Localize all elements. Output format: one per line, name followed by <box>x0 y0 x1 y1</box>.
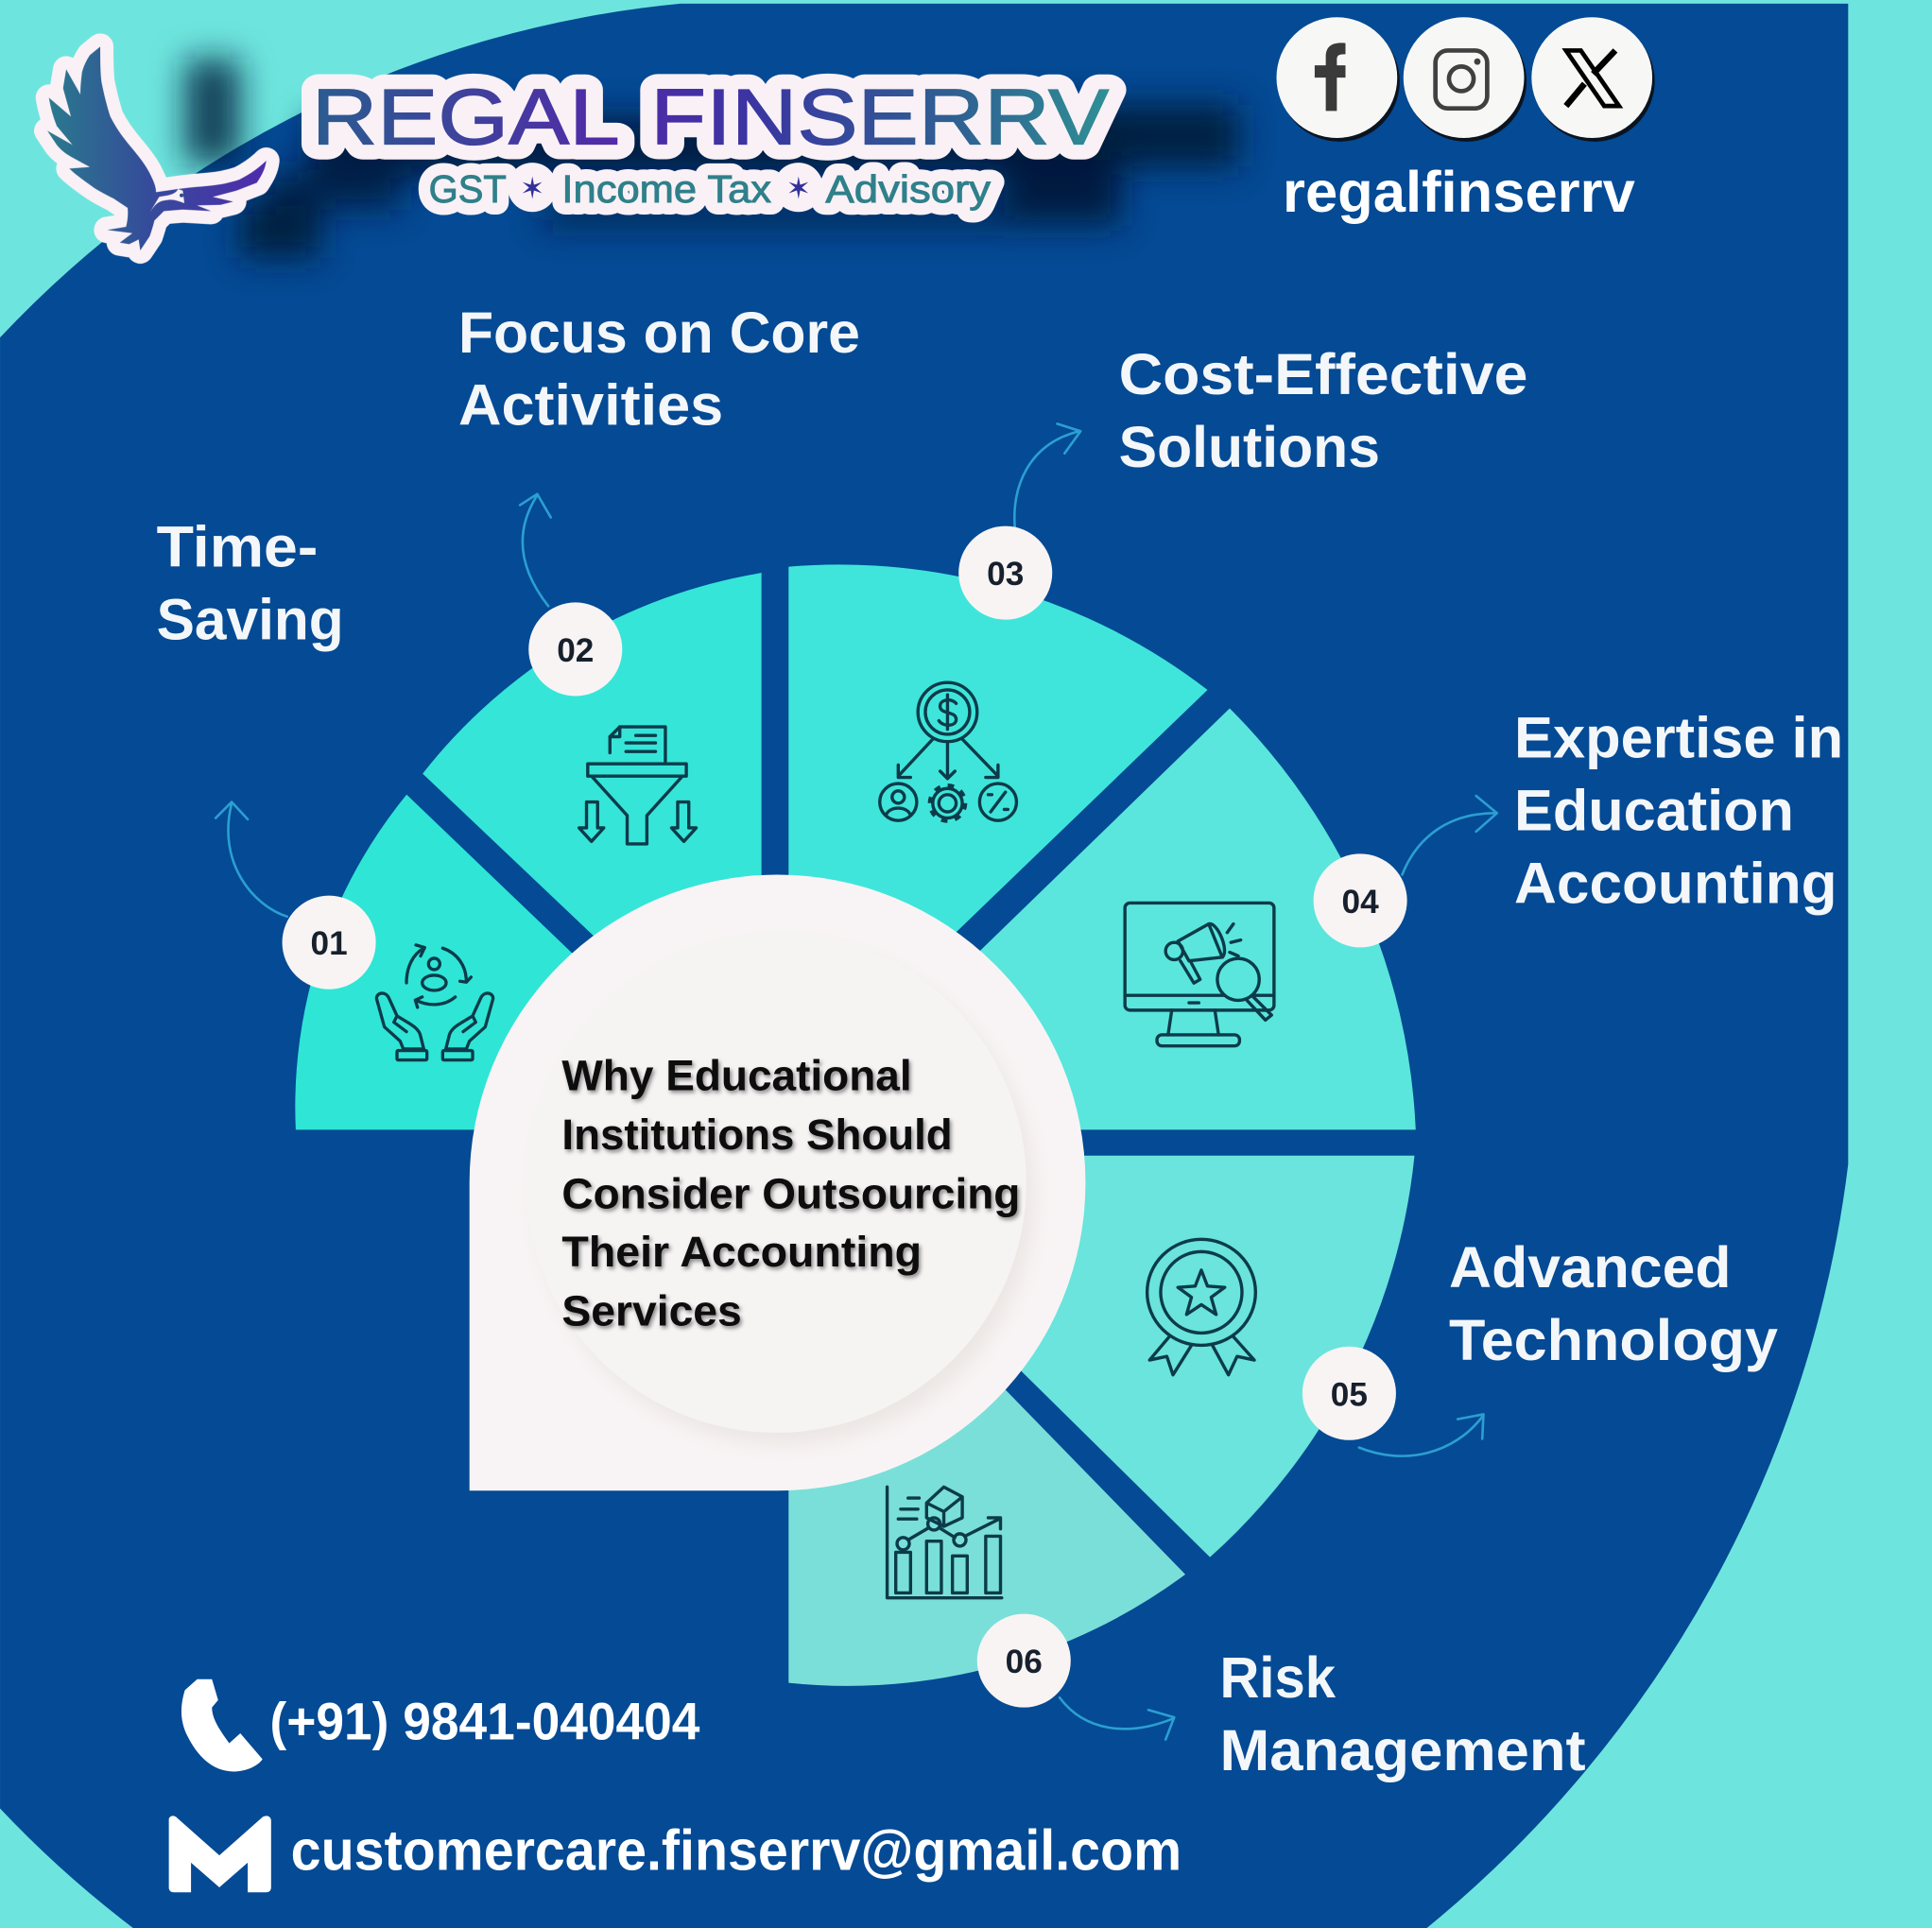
center title: Their Accounting <box>561 1228 922 1276</box>
logo: tagline: Income Tax <box>561 167 771 211</box>
badge 06: 06 <box>1006 1644 1043 1680</box>
logo: brand name: FINSERRV <box>650 73 1110 162</box>
logo: tagline <box>429 163 992 212</box>
icon: monitor with megaphone <box>1125 903 1274 1046</box>
logo: brand name <box>312 73 1110 162</box>
badge 02: 02 <box>557 632 594 669</box>
badge 02 <box>528 602 622 696</box>
icon: dollar split <box>880 682 1016 820</box>
email address: customercare.finserrv@gmail.com <box>291 1819 1182 1883</box>
phone number: (+91) 9841-040404 <box>270 1692 699 1751</box>
logo: brand name: REGAL <box>312 73 620 162</box>
label 04: Expertise in <box>1514 706 1843 770</box>
label 06: Risk <box>1220 1645 1337 1710</box>
badge 01: 01 <box>311 925 348 962</box>
label 02: Activities <box>458 373 723 438</box>
badge 03: 03 <box>987 556 1024 593</box>
label 05: Technology <box>1449 1308 1778 1372</box>
logo: eagle emblem <box>47 46 267 250</box>
center title: Why Educational <box>561 1052 912 1100</box>
label 01 <box>157 515 344 652</box>
center title: Services <box>561 1287 742 1335</box>
segment 05 <box>937 1156 1414 1558</box>
label 02: Focus on Core <box>458 301 860 365</box>
segment 01 <box>295 795 641 1129</box>
center title: Consider Outsourcing <box>561 1170 1020 1218</box>
icon: phone <box>181 1679 263 1771</box>
arrow 03 <box>1014 423 1080 532</box>
logo shadow <box>185 60 1238 257</box>
label 05 <box>1449 1235 1778 1372</box>
label 04: Accounting <box>1514 851 1837 915</box>
badge 01 <box>283 896 376 990</box>
label 02 <box>458 301 860 438</box>
center title: Institutions Should <box>561 1110 953 1159</box>
icon: funnel with document <box>579 727 697 844</box>
logo: brand name: FINSERRV <box>650 73 1110 162</box>
label 05: Advanced <box>1449 1235 1731 1300</box>
arrow 04 <box>1402 796 1497 874</box>
label 03: Cost-Effective <box>1119 342 1527 406</box>
label 06: Management <box>1220 1718 1586 1782</box>
logo: tagline: Income Tax <box>561 167 771 211</box>
icon: growth chart <box>888 1487 1002 1598</box>
center title <box>561 1052 1020 1335</box>
label 01: Time- <box>157 515 318 579</box>
logo: tagline: ✶ <box>520 172 544 205</box>
label 04 <box>1514 706 1843 915</box>
arrow 05 <box>1359 1414 1483 1456</box>
badge 04 <box>1314 853 1407 947</box>
badge 04: 04 <box>1342 884 1379 921</box>
badge 06 <box>977 1614 1071 1708</box>
social handle: regalfinserrv <box>1283 160 1635 224</box>
icon: X <box>1531 17 1655 142</box>
center teardrop <box>470 874 1085 1490</box>
label 06 <box>1220 1645 1586 1782</box>
icon: facebook <box>1276 17 1400 142</box>
label 03: Solutions <box>1119 415 1380 479</box>
logo: tagline: ✶ <box>786 172 811 205</box>
label 04: Education <box>1514 779 1794 843</box>
logo: tagline: GST <box>429 167 507 211</box>
logo: tagline: Advisory <box>825 167 992 211</box>
icon: mail M <box>169 1816 271 1892</box>
arrow 01 <box>216 802 287 917</box>
badge 05: 05 <box>1331 1376 1368 1413</box>
segment 02 <box>423 573 762 1004</box>
badge 05 <box>1302 1347 1396 1440</box>
label 01: Saving <box>157 588 344 652</box>
icon: instagram <box>1404 17 1527 142</box>
badge 03 <box>958 526 1052 620</box>
arrow 06 <box>1060 1697 1174 1740</box>
logo: tagline: GST <box>429 167 507 211</box>
icon: medal <box>1147 1239 1255 1375</box>
icon: hands with person <box>376 945 493 1060</box>
label 03 <box>1119 342 1527 479</box>
logo: brand name: REGAL <box>312 73 620 162</box>
arrow 02 <box>520 494 551 606</box>
segment 03 <box>788 564 1207 1023</box>
segment 04 <box>888 709 1416 1129</box>
logo: tagline: Advisory <box>825 167 992 211</box>
segment 06 <box>788 1294 1185 1686</box>
